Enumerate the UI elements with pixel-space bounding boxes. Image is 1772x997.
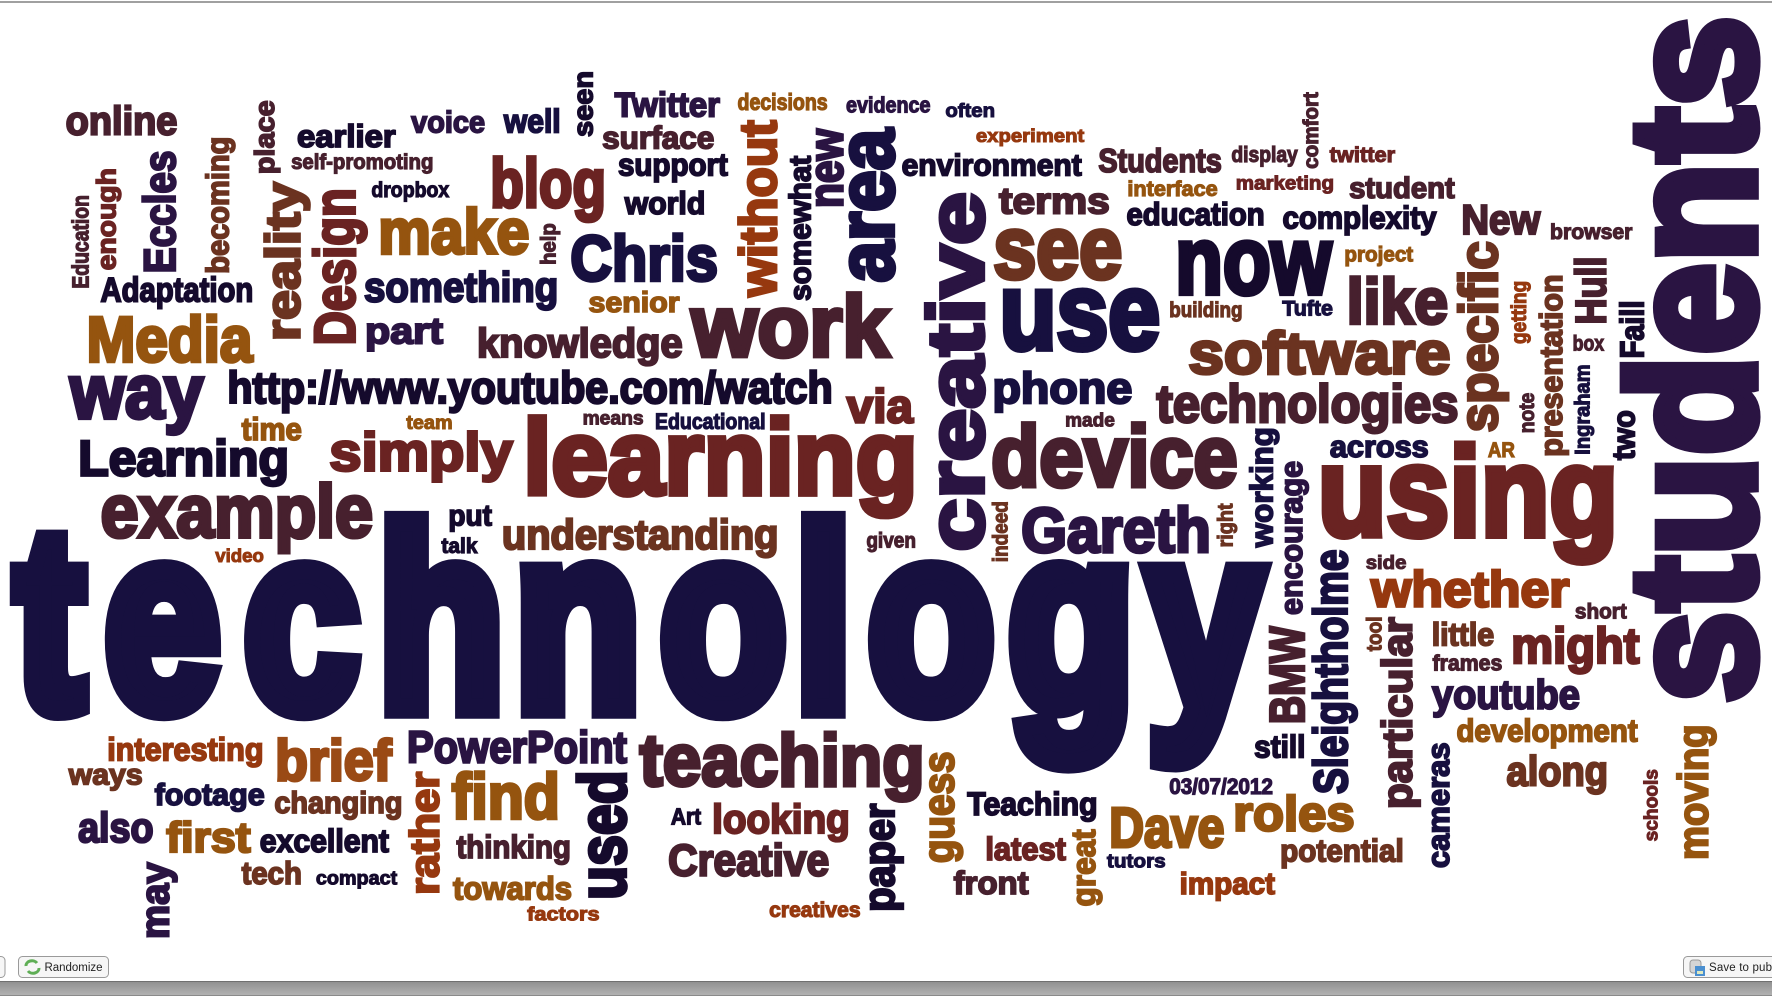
- word: two: two: [1606, 410, 1641, 460]
- word: frames: frames: [1433, 651, 1502, 676]
- word: getting: getting: [1508, 281, 1531, 344]
- word: find: find: [452, 760, 560, 832]
- word: comfort: comfort: [1300, 92, 1323, 169]
- word: Design: Design: [303, 188, 367, 345]
- word: area: area: [821, 128, 910, 283]
- word: Educational: Educational: [655, 409, 766, 434]
- word: complexity: complexity: [1282, 201, 1437, 236]
- word: http://www.youtube.com/watch: http://www.youtube.com/watch: [227, 364, 833, 413]
- word: brief: brief: [275, 729, 392, 793]
- word: dropbox: dropbox: [371, 179, 450, 202]
- word: support: support: [618, 147, 728, 182]
- word: right: right: [1214, 503, 1237, 547]
- word: technology: technology: [15, 474, 1262, 764]
- word: via: via: [847, 380, 914, 432]
- word: Media: Media: [87, 304, 253, 376]
- word: video: video: [215, 545, 264, 566]
- word: becoming: becoming: [201, 137, 236, 274]
- word: senior: senior: [589, 286, 680, 318]
- word: Eccles: Eccles: [134, 151, 185, 273]
- icon: disk and database: [1690, 960, 1705, 976]
- word: changing: changing: [274, 787, 403, 820]
- word: teaching: teaching: [640, 720, 925, 801]
- word: ways: ways: [68, 760, 143, 792]
- word: learning: learning: [523, 398, 918, 517]
- word: front: front: [954, 865, 1029, 901]
- word: part: part: [365, 310, 443, 352]
- word: Faill: Faill: [1614, 300, 1651, 358]
- word: Ingraham: Ingraham: [1571, 364, 1594, 455]
- word: knowledge: knowledge: [477, 320, 683, 366]
- word: still: still: [1254, 729, 1305, 764]
- word: now: now: [1175, 207, 1331, 314]
- word: latest: latest: [985, 831, 1066, 867]
- word: creatives: creatives: [769, 899, 861, 922]
- word: way: way: [69, 350, 203, 435]
- word: short: short: [1575, 601, 1627, 624]
- word: means: means: [583, 407, 644, 429]
- word: rather: rather: [401, 772, 447, 895]
- word: might: might: [1511, 618, 1640, 674]
- word: across: across: [1330, 431, 1429, 464]
- word: creative: creative: [911, 192, 1000, 551]
- word: Chris: Chris: [570, 222, 718, 294]
- word: Adaptation: Adaptation: [100, 272, 253, 310]
- word: cameras: cameras: [1421, 742, 1456, 868]
- word: schools: schools: [1640, 769, 1662, 841]
- word: browser: browser: [1550, 221, 1632, 244]
- word: box: box: [1573, 333, 1605, 356]
- word: tool: tool: [1363, 616, 1386, 651]
- word: Art: Art: [671, 803, 701, 829]
- word: building: building: [1169, 299, 1243, 322]
- word: like: like: [1347, 265, 1448, 337]
- word: encourage: encourage: [1274, 461, 1309, 615]
- word: surface: surface: [602, 120, 714, 155]
- word: potential: potential: [1280, 833, 1404, 868]
- word: using: using: [1318, 421, 1618, 563]
- word: work: work: [691, 279, 890, 375]
- word: particular: particular: [1373, 617, 1420, 809]
- word: put: put: [448, 501, 492, 533]
- word: terms: terms: [999, 180, 1110, 222]
- word: note: note: [1516, 393, 1539, 433]
- word: Teaching: Teaching: [967, 786, 1098, 822]
- word: see: see: [993, 198, 1122, 297]
- word: example: example: [101, 469, 373, 553]
- word: experiment: experiment: [976, 125, 1085, 146]
- word: interface: interface: [1127, 178, 1218, 201]
- word: world: world: [624, 186, 705, 221]
- word: time: time: [242, 412, 302, 447]
- word: simply: simply: [329, 423, 513, 483]
- word: technologies: technologies: [1157, 375, 1459, 434]
- word: 03/07/2012: 03/07/2012: [1169, 774, 1273, 799]
- word: Students: Students: [1098, 143, 1222, 180]
- word: thinking: thinking: [456, 829, 571, 865]
- button: Randomize: [18, 956, 108, 978]
- word: footage: footage: [155, 779, 265, 812]
- word: well: well: [503, 103, 561, 140]
- word: without: without: [730, 120, 788, 298]
- word: student: student: [1349, 173, 1455, 205]
- word: something: something: [364, 264, 558, 311]
- word: youtube: youtube: [1432, 671, 1580, 717]
- word: New: New: [1461, 196, 1541, 243]
- word: little: little: [1432, 616, 1494, 652]
- word: moving: moving: [1669, 725, 1716, 860]
- word: seen: seen: [568, 71, 599, 137]
- word: Creative: Creative: [668, 835, 829, 886]
- word: make: make: [378, 197, 529, 267]
- word: somewhat: somewhat: [785, 156, 818, 301]
- word: guess: guess: [915, 752, 964, 863]
- word: Learning: Learning: [78, 430, 289, 486]
- top edge line: [0, 1, 1772, 3]
- word: environment: environment: [902, 149, 1082, 182]
- word: earlier: earlier: [297, 119, 396, 154]
- word: reality: reality: [257, 182, 310, 341]
- word: twitter: twitter: [1330, 144, 1395, 167]
- word: tutors: tutors: [1107, 850, 1166, 872]
- word: impact: impact: [1180, 868, 1275, 901]
- word: Education: Education: [68, 195, 94, 289]
- word: team: team: [406, 412, 453, 434]
- word: Twitter: Twitter: [615, 86, 720, 124]
- word: compact: compact: [316, 867, 398, 889]
- word: voice: voice: [411, 106, 485, 139]
- word: Dave: Dave: [1109, 796, 1224, 859]
- word: phone: phone: [992, 364, 1132, 413]
- word: also: also: [78, 804, 154, 851]
- partial button at left edge: [0, 956, 5, 978]
- word: excellent: excellent: [260, 823, 389, 859]
- word: new: new: [799, 129, 853, 208]
- button: Save to public gallery: Save to pub: [1709, 962, 1772, 974]
- word: specific: specific: [1449, 241, 1509, 432]
- word: use: use: [1000, 251, 1160, 372]
- word: first: first: [166, 814, 251, 862]
- word: project: project: [1344, 244, 1413, 267]
- word: interesting: interesting: [107, 732, 264, 768]
- word: Sleightholme: Sleightholme: [1304, 549, 1357, 794]
- word: along: along: [1507, 747, 1608, 794]
- word: online: online: [66, 99, 177, 143]
- word: indeed: indeed: [989, 501, 1012, 562]
- word: looking: looking: [712, 796, 850, 842]
- word: AR: AR: [1488, 439, 1515, 462]
- word: BMW: BMW: [1261, 626, 1315, 724]
- word: great: great: [1066, 829, 1103, 906]
- icon: green refresh arrows: [26, 961, 39, 973]
- word: side: side: [1366, 552, 1406, 574]
- word: factors: factors: [527, 903, 600, 925]
- word: working: working: [1245, 427, 1280, 548]
- word: given: given: [866, 529, 916, 552]
- word: Hull: Hull: [1567, 257, 1615, 324]
- word: marketing: marketing: [1236, 172, 1334, 194]
- word: may: may: [133, 862, 177, 939]
- word: decisions: decisions: [738, 89, 828, 115]
- word: used: used: [566, 770, 640, 900]
- word: often: often: [945, 100, 995, 122]
- word: towards: towards: [453, 871, 572, 907]
- word: software: software: [1188, 319, 1450, 386]
- word: place: place: [249, 100, 280, 174]
- word: evidence: evidence: [846, 92, 931, 117]
- bottom window bar: [0, 981, 1772, 996]
- word: paper: paper: [855, 804, 904, 912]
- word: Tufte: Tufte: [1282, 298, 1333, 321]
- word: understanding: understanding: [502, 511, 779, 558]
- word: enough: enough: [91, 168, 122, 270]
- button: Randomize: Randomize: [44, 962, 102, 974]
- word: Gareth: Gareth: [1021, 496, 1211, 566]
- word: roles: roles: [1233, 787, 1355, 841]
- word: blog: blog: [490, 145, 606, 222]
- word: PowerPoint: PowerPoint: [407, 722, 627, 773]
- word: tech: tech: [242, 856, 302, 891]
- word: help: help: [537, 223, 560, 265]
- word: whether: whether: [1370, 562, 1569, 618]
- word: display: display: [1231, 142, 1299, 167]
- word: device: device: [991, 409, 1237, 505]
- word: made: made: [1065, 410, 1115, 432]
- word: development: development: [1456, 714, 1638, 749]
- word: presentation: presentation: [1534, 275, 1569, 457]
- button: Save to public gallery: [1684, 956, 1772, 978]
- word: education: education: [1126, 197, 1265, 232]
- word: self-promoting: self-promoting: [291, 151, 433, 174]
- word: talk: talk: [441, 535, 478, 558]
